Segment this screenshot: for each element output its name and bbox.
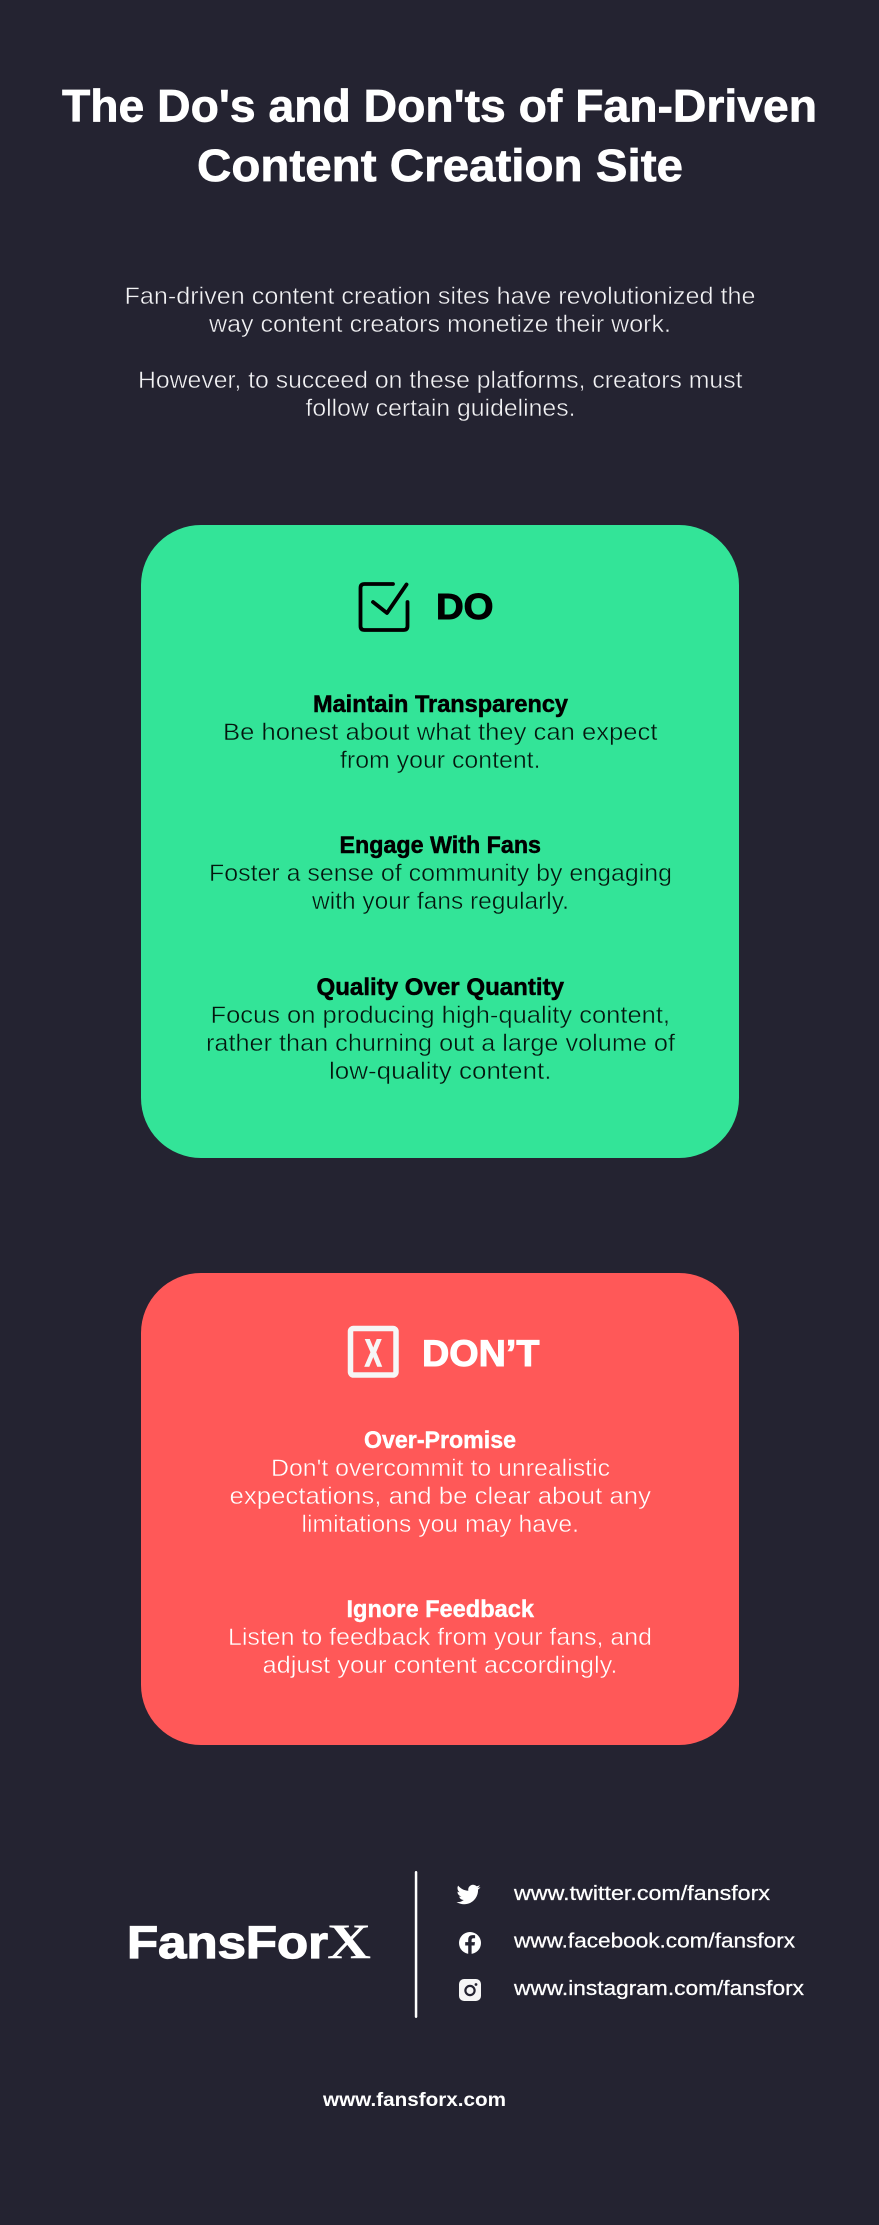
social: twitter xyxy=(456,1883,770,1905)
social: instagram xyxy=(459,1978,804,2001)
icon: checkbox xyxy=(360,584,408,630)
item: quality over quantity: Quality Over Quantity xyxy=(316,974,565,1001)
heading: do: DO xyxy=(436,586,494,627)
title: Content Creation Site xyxy=(197,140,683,191)
item: engage with fans: with your fans regularly. xyxy=(311,888,569,915)
item: over-promise: expectations, and be clear about any xyxy=(230,1483,652,1510)
item: over-promise: Over-Promise xyxy=(364,1427,516,1454)
item: over-promise: limitations you may have. xyxy=(302,1511,579,1538)
intro text: However, to succeed on these platforms, creators must xyxy=(138,367,743,394)
intro text: Fan-driven content creation sites have revolutionized the xyxy=(124,283,756,310)
item: quality over quantity: low-quality content. xyxy=(329,1058,552,1085)
intro text: follow certain guidelines. xyxy=(306,395,576,422)
logo: FansForX: X xyxy=(327,1913,371,1969)
icon: x box xyxy=(350,1328,396,1375)
item: quality over quantity: Focus on producing high-quality content, xyxy=(210,1002,670,1029)
link: instagram: www.instagram.com/fansforx xyxy=(513,1978,804,2000)
item: over-promise xyxy=(230,1427,652,1538)
divider xyxy=(415,1871,417,2018)
link: twitter: www.twitter.com/fansforx xyxy=(513,1883,770,1905)
logo: FansForX xyxy=(127,1913,371,1969)
item: over-promise: Don't overcommit to unrealistic xyxy=(271,1455,610,1482)
item: ignore feedback: adjust your content accordingly. xyxy=(262,1652,618,1679)
item: ignore feedback xyxy=(228,1596,652,1679)
title xyxy=(62,80,817,191)
panel: do xyxy=(141,525,739,1158)
icon: facebook xyxy=(459,1932,481,1954)
logo: FansForX: FansFor xyxy=(127,1917,328,1968)
intro text: way content creators monetize their work. xyxy=(208,311,671,338)
item: maintain transparency: Be honest about what they can expect xyxy=(223,719,658,746)
icon: x box: X xyxy=(365,1333,382,1375)
item: engage with fans: Foster a sense of community by engaging xyxy=(209,860,672,887)
icon: instagram xyxy=(459,1979,481,2001)
icon: twitter xyxy=(456,1885,480,1904)
item: quality over quantity xyxy=(206,974,675,1085)
item: maintain transparency: from your content. xyxy=(340,747,540,774)
item: ignore feedback: Ignore Feedback xyxy=(346,1596,535,1623)
item: quality over quantity: rather than churning out a large volume of xyxy=(206,1030,675,1057)
item: engage with fans: Engage With Fans xyxy=(340,832,541,859)
panel: don't xyxy=(141,1273,739,1745)
link: facebook: www.facebook.com/fansforx xyxy=(513,1930,795,1952)
item: maintain transparency xyxy=(223,691,658,774)
title: The Do's and Don'ts of Fan-Driven xyxy=(62,80,817,132)
item: maintain transparency: Maintain Transparency xyxy=(313,691,569,718)
intro text xyxy=(124,283,756,422)
item: engage with fans xyxy=(209,832,672,915)
heading: don't: DON’T xyxy=(422,1333,540,1374)
social: facebook xyxy=(459,1930,795,1954)
website url: www.fansforx.com xyxy=(322,2089,506,2111)
item: ignore feedback: Listen to feedback from your fans, and xyxy=(228,1624,652,1651)
